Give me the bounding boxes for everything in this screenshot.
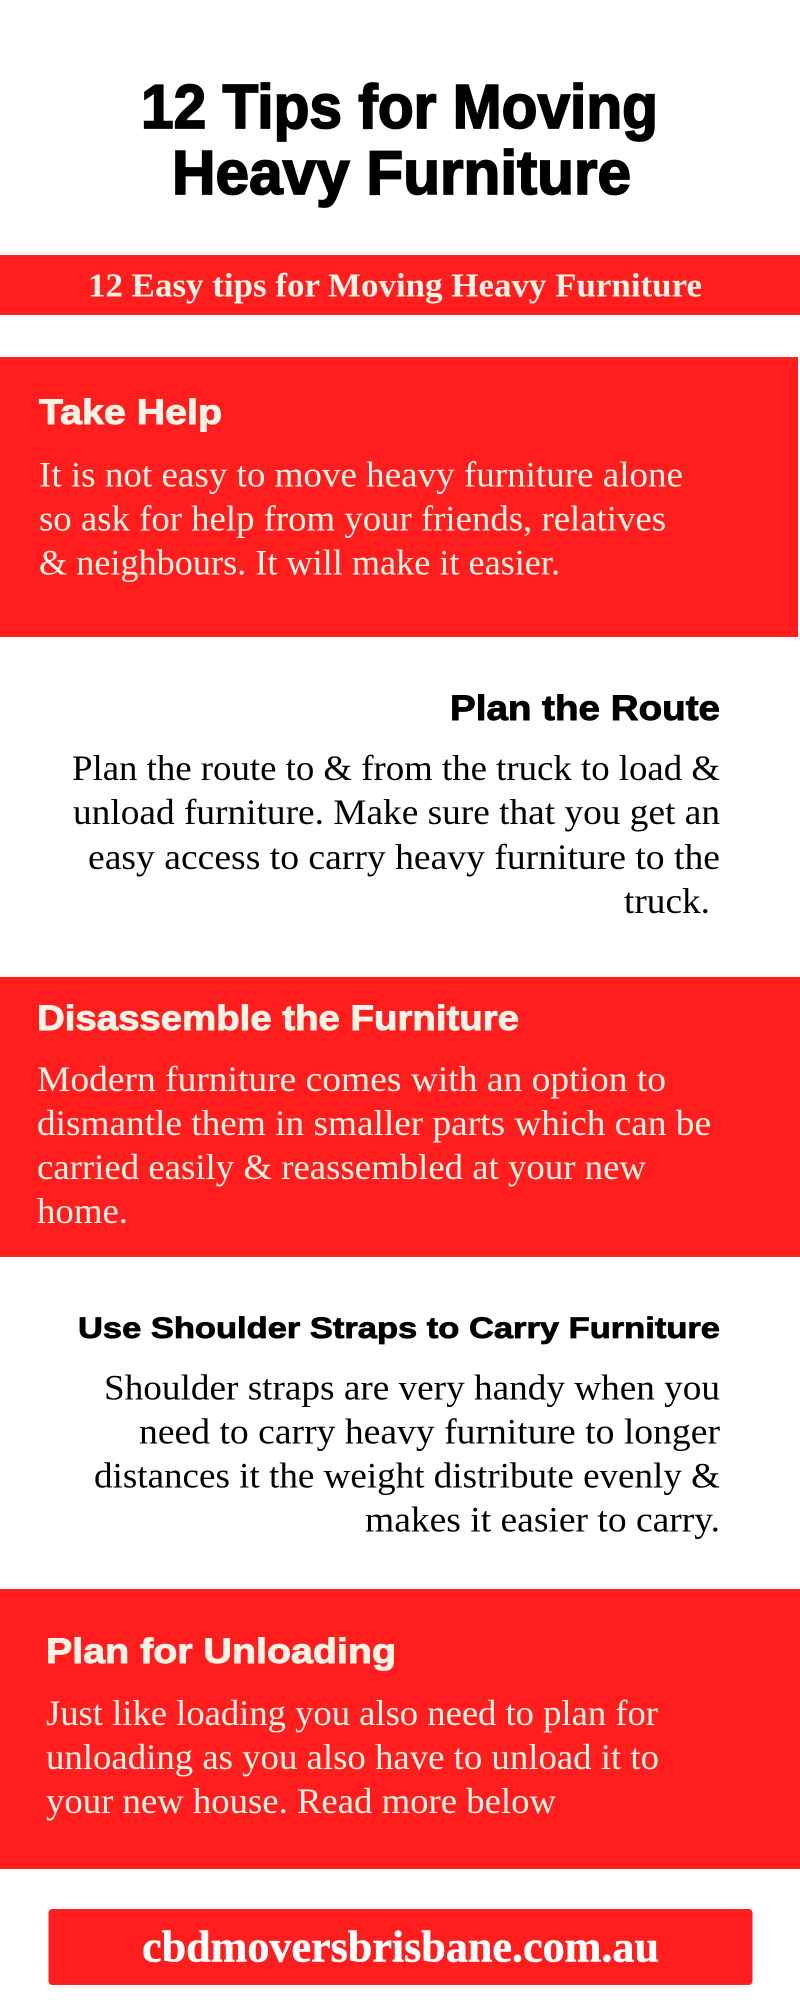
heading: Disassemble the Furniture: Disassemble the Furniture <box>37 999 519 1038</box>
text block: Take Help: & neighbours. It will make it easier. <box>39 542 560 582</box>
panel: Take Help <box>0 357 798 637</box>
heading: Plan for Unloading: Plan for Unloading <box>46 1632 396 1671</box>
website button: cbdmoversbrisbane.com.au <box>142 1922 659 1972</box>
text block: Plan for Unloading: Just like loading you also need to plan for <box>46 1693 658 1733</box>
text block: Disassemble the Furniture: carried easily & reassembled at your new <box>37 1147 646 1187</box>
text block: Disassemble the Furniture: dismantle them in smaller parts which can be <box>37 1103 711 1143</box>
text block: Plan for Unloading: unloading as you also have to unload it to <box>46 1737 659 1777</box>
text block: Take Help: so ask for help from your friends, relatives <box>39 498 666 538</box>
text block: Disassemble the Furniture <box>37 1059 711 1231</box>
text block: Disassemble the Furniture: home. <box>37 1191 128 1231</box>
text block: Plan the Route: Plan the route to & from the truck to load & <box>72 748 720 788</box>
panel: Plan for Unloading <box>0 1589 800 1869</box>
title: 12 Tips for Moving <box>141 73 658 142</box>
text block: Use Shoulder Straps: Shoulder straps are very handy when you <box>104 1368 720 1408</box>
text block: Plan the Route: easy access to carry heavy furniture to the <box>88 837 720 877</box>
heading: Use Shoulder Straps to Carry Furniture: Use Shoulder Straps to Carry Furniture <box>78 1312 720 1345</box>
text block: Use Shoulder Straps: makes it easier to carry. <box>365 1500 720 1540</box>
text block: Disassemble the Furniture: Modern furniture comes with an option to <box>37 1059 666 1099</box>
text block: Take Help: It is not easy to move heavy furniture alone <box>39 454 683 494</box>
text block: Plan the Route: truck. <box>624 881 710 921</box>
title: Heavy Furniture <box>172 139 631 208</box>
subtitle banner: 12 Easy tips for Moving Heavy Furniture <box>88 268 702 304</box>
text block: Use Shoulder Straps: need to carry heavy furniture to longer <box>139 1412 720 1452</box>
text block: Plan the Route: unload furniture. Make sure that you get an <box>73 792 720 832</box>
heading: Plan the Route: Plan the Route <box>450 689 720 728</box>
panel: Disassemble the Furniture <box>0 977 800 1257</box>
panel: Use Shoulder Straps to Carry Furniture <box>0 1257 800 1589</box>
text block: Use Shoulder Straps: distances it the weight distribute evenly & <box>94 1456 720 1496</box>
text block: Take Help <box>39 454 683 582</box>
subtitle banner <box>0 255 800 315</box>
text block: Use Shoulder Straps <box>94 1368 720 1540</box>
title <box>141 73 658 208</box>
panel: Plan the Route <box>0 637 800 977</box>
text block: Plan for Unloading: your new house. Read more below <box>46 1781 556 1821</box>
text block: Plan the Route <box>72 748 720 921</box>
text block: Plan for Unloading <box>46 1693 659 1821</box>
heading: Take Help: Take Help <box>39 393 222 432</box>
website button <box>48 1909 752 1985</box>
